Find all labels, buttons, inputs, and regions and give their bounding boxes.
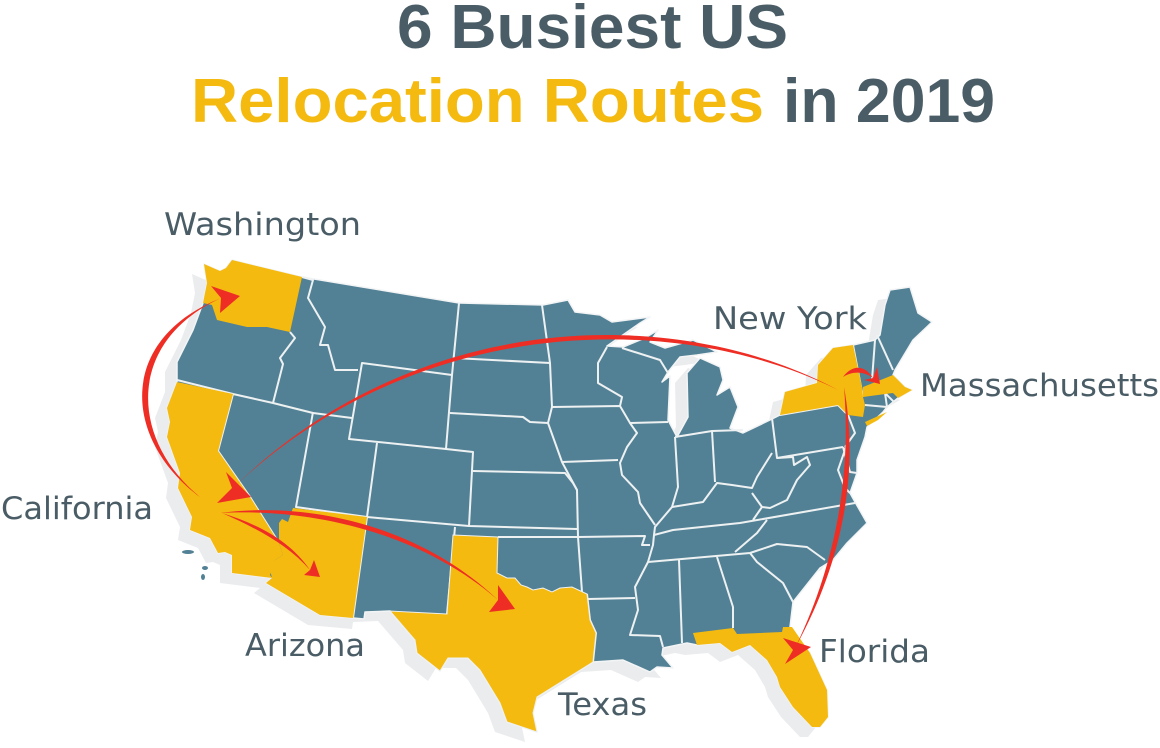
label: Texas: Texas: [557, 687, 647, 723]
arrow: California to Arizona: [222, 513, 320, 577]
heading line 2 highlighted: Relocation Routes: [191, 67, 764, 136]
state: Arizona highlighted: [266, 508, 367, 618]
state: New York highlighted: [780, 345, 887, 426]
arrow: California to Washington: [142, 286, 240, 497]
state: California highlighted: [167, 382, 283, 578]
label: Florida: Florida: [819, 634, 930, 670]
state: Texas highlighted: [390, 535, 596, 732]
label: Massachusetts: Massachusetts: [920, 368, 1159, 404]
state labels: [1, 207, 1159, 723]
label: California: California: [1, 491, 153, 527]
map drop shadow: [155, 270, 920, 742]
label: Arizona: Arizona: [245, 628, 365, 664]
arrow: New York to Florida: [783, 387, 850, 664]
state: Florida highlighted: [693, 627, 828, 727]
label: New York: New York: [713, 301, 867, 337]
map of the United States: [155, 260, 932, 742]
heading line 2 end: in 2019: [783, 67, 995, 136]
label: Washington: Washington: [164, 207, 361, 243]
state: Massachusetts highlighted: [863, 375, 912, 398]
arrow: California to Texas: [220, 510, 515, 612]
route arrows: [142, 286, 880, 664]
title: [191, 0, 995, 136]
state borders: [177, 277, 895, 662]
Channel Islands: [182, 550, 208, 580]
base map silhouette: [167, 260, 932, 732]
arrow: New York to California: [217, 335, 838, 503]
arrow: New York to Massachusetts: [843, 367, 880, 384]
state: Washington highlighted: [203, 260, 302, 332]
